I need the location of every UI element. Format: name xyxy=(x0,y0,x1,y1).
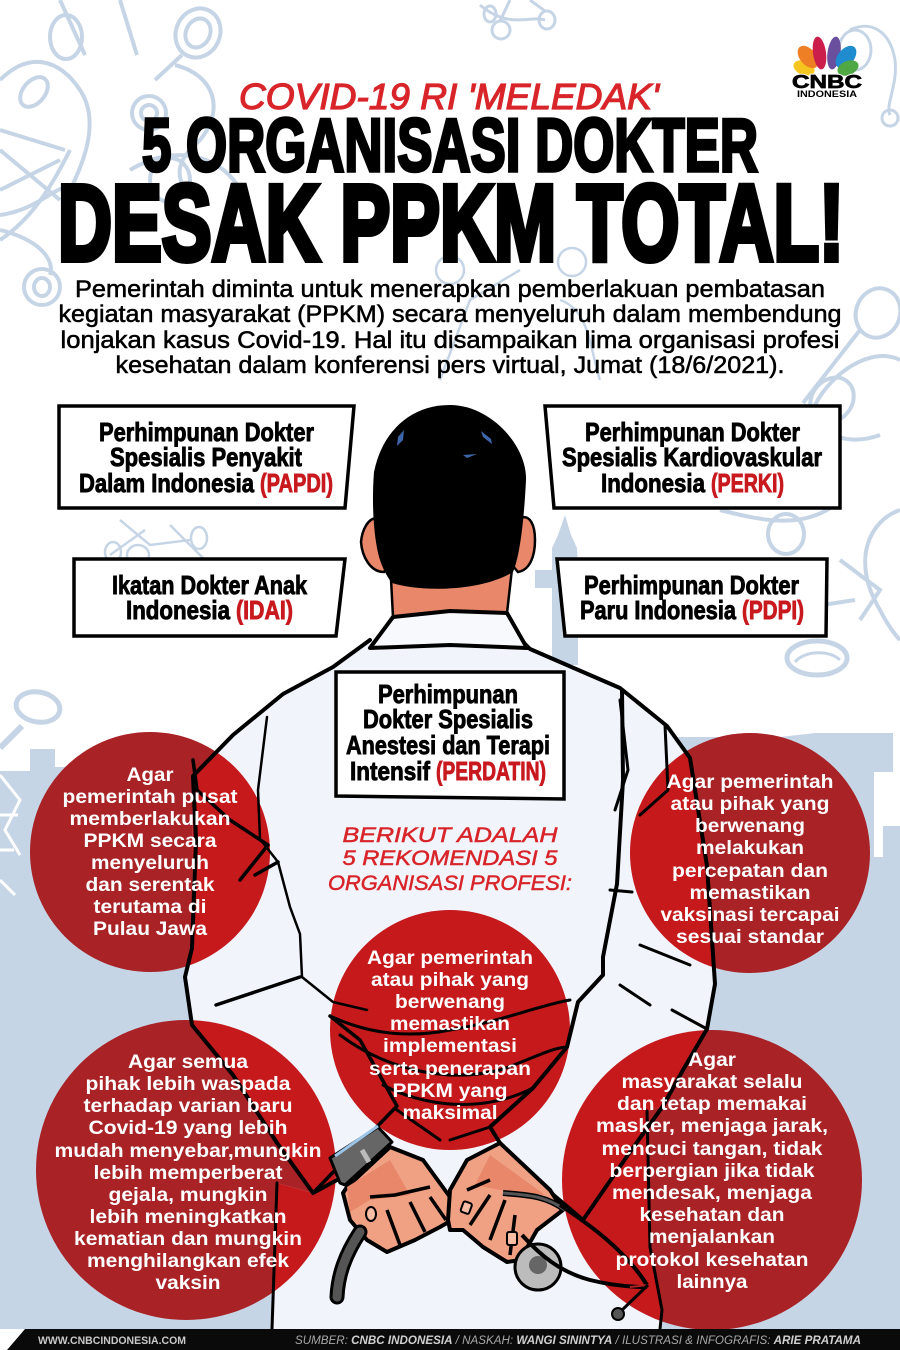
logo: CNBC Indonesia: CNBC xyxy=(792,72,862,92)
circle text: bottom left: gejala, mungkin xyxy=(108,1184,268,1206)
circles: bright tone on coat xyxy=(190,752,712,1320)
recommendations heading: 5 REKOMENDASI 5 xyxy=(342,847,558,870)
intro paragraph: Pemerintah diminta untuk menerapkan pemberlakuan pembatasan xyxy=(75,276,825,303)
monument tower xyxy=(535,515,592,665)
circle text: bottom right: kesehatan dan xyxy=(640,1204,784,1226)
left stethoscope tube xyxy=(337,1232,360,1297)
circle text: top right: percepatan dan xyxy=(672,860,828,882)
recommendations heading: BERIKUT ADALAH xyxy=(342,824,558,847)
circle text: centre: berwenang xyxy=(395,991,505,1013)
box: PERDATIN: Perhimpunan xyxy=(378,679,518,709)
box: PAPDI: Perhimpunan Dokter xyxy=(99,417,314,447)
circles: outer dark tone xyxy=(30,732,870,1330)
circle text: top left xyxy=(62,764,238,940)
right hand xyxy=(448,1143,563,1262)
doctor coat xyxy=(185,640,715,1329)
circle text: top left: Agar xyxy=(126,764,174,786)
ear right xyxy=(508,517,535,572)
circle text: top right: sesuai standar xyxy=(676,926,824,948)
circle text: top left: terutama di xyxy=(94,896,206,918)
circle text: bottom left: menghilangkan efek xyxy=(87,1250,289,1272)
circle text: bottom left: Covid-19 yang lebih xyxy=(88,1117,288,1139)
circle text: top right xyxy=(660,771,840,948)
circle text: bottom left: mudah menyebar,mungkin xyxy=(54,1140,322,1162)
intro paragraph: kesehatan dalam konferensi pers virtual, Jumat (18/6/2021). xyxy=(116,352,784,379)
box: PERKI: Spesialis Kardiovaskular xyxy=(562,442,822,472)
footer bar: WWW.CNBCINDONESIA.COM xyxy=(38,1335,186,1347)
collar xyxy=(370,611,527,648)
box: IDAI: Ikatan Dokter Anak xyxy=(112,570,307,600)
neck xyxy=(390,560,513,617)
circle text: top right: berwenang xyxy=(695,815,805,837)
circle text: bottom right: lainnya xyxy=(676,1271,748,1293)
box: PDPI: Paru Indonesia xyxy=(580,595,736,625)
circle text: bottom left: Agar semua xyxy=(128,1051,248,1073)
box: PERKI: Indonesia xyxy=(601,468,705,498)
circle text: top left: menyeluruh xyxy=(91,852,209,874)
box: PAPDI: Dalam Indonesia xyxy=(79,468,254,498)
cuff xyxy=(330,1126,392,1185)
box: PDPI: (PDPI) xyxy=(742,595,804,625)
city skyline xyxy=(0,685,900,1329)
circle text: bottom right: masyarakat selalu xyxy=(622,1071,802,1093)
box: PERDATIN: Dokter Spesialis xyxy=(363,704,533,734)
circle text: top left: pemerintah pusat xyxy=(62,786,238,808)
subtitle red: COVID-19 RI 'MELEDAK' xyxy=(239,76,660,117)
box: PERDATIN xyxy=(336,672,564,799)
circle text: bottom right: Agar xyxy=(688,1049,736,1071)
stethoscope xyxy=(503,1193,648,1320)
circle text: bottom right: dan tetap memakai xyxy=(617,1093,807,1115)
box: PERKI: Perhimpunan Dokter xyxy=(585,417,800,447)
coat outlines xyxy=(185,636,715,1329)
footer bar xyxy=(7,1329,900,1350)
circle text: bottom left: vaksin xyxy=(156,1272,220,1294)
circle text: bottom left: terhadap varian baru xyxy=(84,1095,292,1117)
virus doodle background xyxy=(0,0,900,748)
circle text: bottom left: pihak lebih waspada xyxy=(86,1073,291,1095)
box: IDAI: Indonesia xyxy=(126,595,230,625)
circle text: bottom right: berpergian jika tidak xyxy=(610,1160,815,1182)
box: PAPDI xyxy=(59,406,354,508)
circle text: top right: atau pihak yang xyxy=(670,793,830,815)
circle text: bottom right: mendesak, menjaga xyxy=(612,1182,812,1204)
circle text: top left: dan serentak xyxy=(86,874,215,896)
circle text: centre: memastikan xyxy=(390,1013,510,1035)
circle text: top right: Agar pemerintah xyxy=(666,771,834,793)
logo: CNBC Indonesia: INDONESIA xyxy=(797,89,857,100)
box: PERKI xyxy=(545,406,840,508)
circle text: centre: maksimal xyxy=(402,1102,498,1124)
box: PAPDI: Spesialis Penyakit xyxy=(110,442,302,472)
circle text: centre: atau pihak yang xyxy=(371,969,529,991)
circle text: bottom right: menjalankan xyxy=(649,1226,775,1248)
circle text: centre: implementasi xyxy=(383,1035,517,1057)
ear left xyxy=(361,518,392,572)
circle text: top right: memastikan xyxy=(690,882,810,904)
head hair xyxy=(373,405,526,589)
recommendations heading xyxy=(328,824,572,895)
footer bar: SUMBER: CNBC INDONESIA / NASKAH: WANGI SININTYA / ILUSTRASI & INFOGRAFIS: ARIE PRATAMA xyxy=(295,1335,861,1347)
box: PERDATIN: Intensif xyxy=(350,756,430,786)
box: PERDATIN: Anestesi dan Terapi xyxy=(346,730,550,760)
box: PAPDI: (PAPDI) xyxy=(260,468,333,498)
circle text: bottom right: masker, menjaga jarak, xyxy=(596,1115,828,1137)
circle text: top left: memberlakukan xyxy=(70,808,230,830)
circle text: centre: PPKM yang xyxy=(392,1080,508,1102)
circle text: centre: Agar pemerintah xyxy=(367,947,533,969)
box: PERKI: (PERKI) xyxy=(711,468,784,498)
hair highlights xyxy=(397,430,492,458)
box: PDPI xyxy=(557,559,827,636)
circle text: bottom left xyxy=(54,1051,322,1294)
left hand xyxy=(343,1147,453,1252)
box: IDAI xyxy=(74,559,345,636)
box: IDAI: (IDAI) xyxy=(236,595,293,625)
circle text: top left: PPKM secara xyxy=(84,830,217,852)
logo: CNBC Indonesia xyxy=(791,36,862,100)
logo: CNBC Indonesia: CNBC xyxy=(792,72,862,92)
circle text: bottom left: lebih meningkatkan xyxy=(90,1206,286,1228)
circle text: bottom left: kematian dan mungkin xyxy=(74,1228,302,1250)
box: PERDATIN: (PERDATIN) xyxy=(436,756,546,786)
circle text: bottom left: lebih memperberat xyxy=(94,1162,283,1184)
circle text: top right: vaksinasi tercapai xyxy=(660,904,840,926)
circle text: top left: Pulau Jawa xyxy=(93,918,207,940)
intro paragraph: lonjakan kasus Covid-19. Hal itu disampaikan lima organisasi profesi xyxy=(60,327,840,354)
circle text: bottom right xyxy=(596,1049,828,1293)
circle text: bottom right: mencuci tangan, tidak xyxy=(602,1138,823,1160)
box: PDPI: Perhimpunan Dokter xyxy=(584,570,799,600)
recommendations heading: ORGANISASI PROFESI: xyxy=(328,872,572,895)
circle text: centre: serta penerapan xyxy=(369,1058,531,1080)
intro paragraph xyxy=(58,276,842,379)
circle text: centre xyxy=(367,947,533,1124)
white doodle on skyline xyxy=(0,775,20,895)
circle text: top right: melakukan xyxy=(696,837,804,859)
circle text: bottom right: protokol kesehatan xyxy=(616,1249,808,1271)
intro paragraph: kegiatan masyarakat (PPKM) secara menyeluruh dalam membendung xyxy=(58,301,842,328)
